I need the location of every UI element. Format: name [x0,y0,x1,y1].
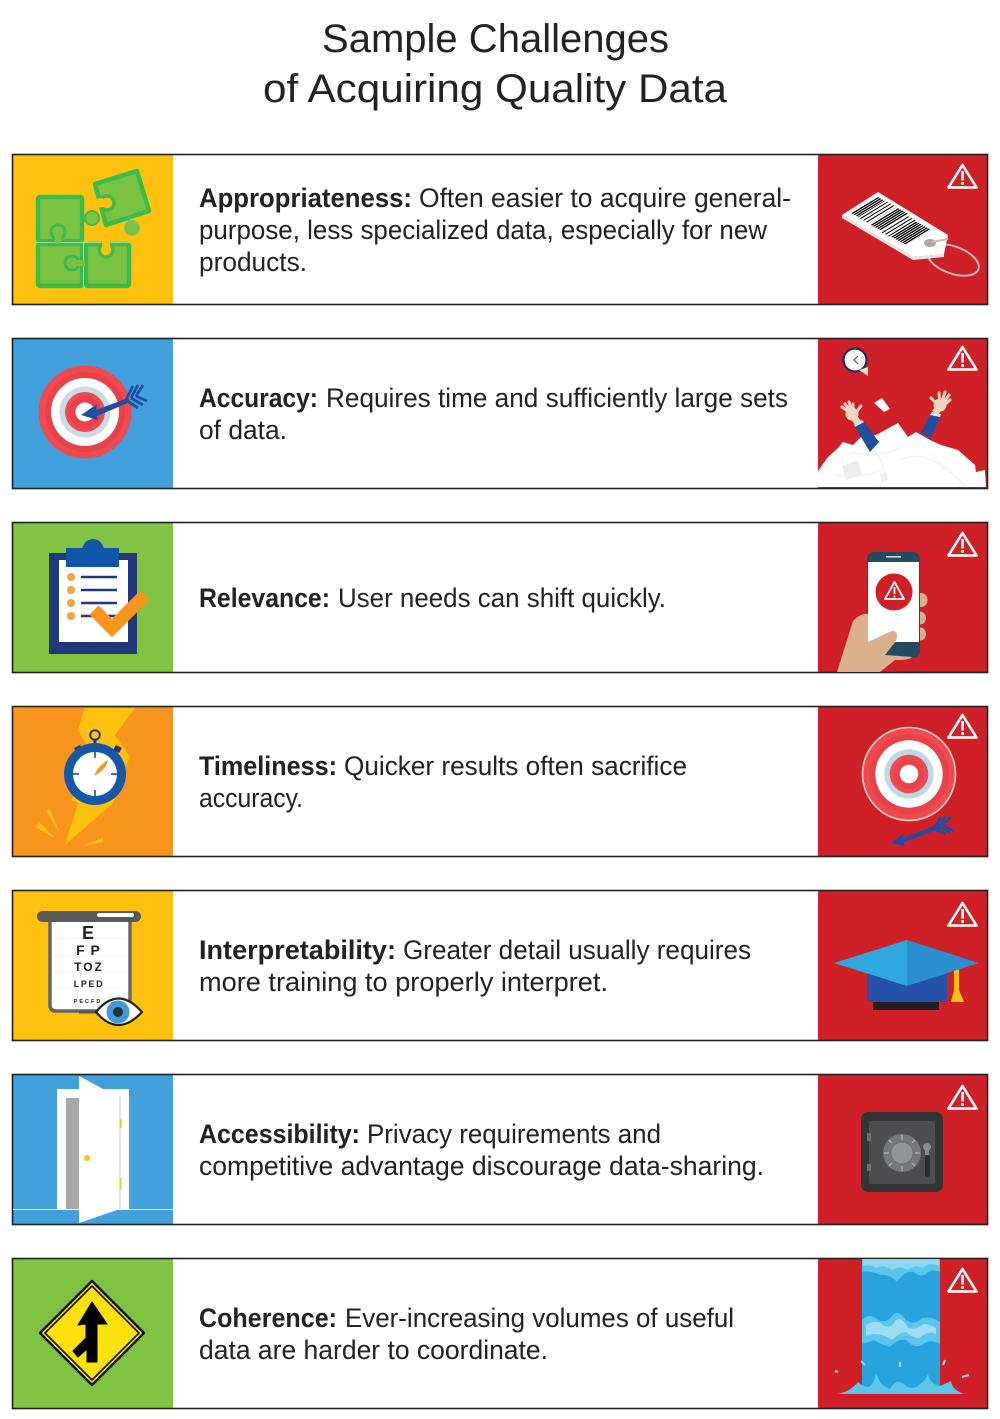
panel: interpretability [12,890,988,1041]
panel: relevance [12,522,988,673]
icon: eye chart: F P [76,942,101,958]
icon: open door [13,1076,173,1223]
icon: alert triangle [948,1269,976,1292]
icon: eye chart: PECFD [74,999,102,1005]
text: timeliness: Quicker results often sacrifice [344,751,687,781]
icon: target with missed arrow [862,728,956,846]
right sleeve and hand [921,392,950,438]
panel: accuracy [12,338,988,489]
text: accessibility [199,1119,764,1181]
right red panel [818,891,988,1041]
left sleeve and hand [842,402,879,452]
text: coherence: data are harder to coordinate. [199,1335,548,1365]
text: accessibility: Accessibility: [199,1119,360,1149]
right red panel [818,155,988,305]
left colour panel [13,155,173,305]
icon: puzzle pieces [36,171,149,288]
left colour panel [13,707,173,857]
right red panel [818,1259,988,1409]
icon: alert triangle [948,903,976,926]
icon: alert triangle [948,715,976,738]
icon: eye chart: LPED [74,979,104,989]
text: appropriateness: Appropriateness: [199,183,412,213]
icon: eye chart: TOZ [74,960,104,974]
text: timeliness [199,751,687,813]
panel: accessibility [12,1074,988,1225]
text: appropriateness: purpose, less specialized data, especially for new [199,215,768,245]
panel: coherence [12,1258,988,1409]
left colour panel [13,1259,173,1409]
text: accuracy: Requires time and sufficiently large sets [326,383,788,413]
icon: stopwatch with lightning [35,708,135,846]
text: accuracy [199,383,788,445]
text: coherence: Coherence: [199,1303,337,1333]
panel: appropriateness [12,154,988,305]
icon: alert triangle [948,1086,976,1108]
text: coherence: Ever-increasing volumes of useful [345,1303,734,1333]
icon: eye chart: E [82,923,94,943]
text: relevance [199,583,666,613]
icon: merge road sign [40,1281,144,1385]
icon: eye chart [37,911,142,1025]
text: timeliness: Timeliness: [199,751,337,781]
left colour panel [13,339,173,489]
text: accessibility: competitive advantage discourage data-sharing. [199,1151,764,1181]
text: accessibility: Privacy requirements and [367,1119,661,1149]
icon: alert triangle [948,165,976,188]
left colour panel [13,891,173,1041]
icon: phone alert in hand [837,552,928,672]
icon: safe [861,1112,943,1192]
icon: alert triangle [948,347,976,370]
title: of Acquiring Quality Data [263,67,728,111]
text: relevance: Relevance: [199,583,330,613]
icon: target with arrow [38,366,147,458]
title [263,17,728,111]
text: timeliness: accuracy. [199,783,303,813]
icon: barcode tag [842,192,983,282]
icon: graduation cap [834,940,979,1010]
text: interpretability: Interpretability: [199,935,396,965]
text: interpretability: Greater detail usually requires [403,935,751,965]
text: accuracy: of data. [199,415,287,445]
right red panel [818,523,988,673]
text: interpretability: more training to properly interpret. [199,967,608,997]
text: interpretability [199,935,751,997]
left colour panel [13,1075,173,1225]
right red panel [818,707,988,857]
right red panel [818,339,988,489]
icon: buried in paperwork [818,348,986,487]
left colour panel [13,523,173,673]
text: appropriateness: Often easier to acquire general- [419,183,791,213]
text: coherence [199,1303,734,1365]
text: appropriateness [199,183,791,277]
title: Sample Challenges [322,17,669,61]
right red panel [818,1075,988,1225]
text: accuracy: Accuracy: [199,383,318,413]
icon: waterfall [835,1259,969,1394]
text: relevance: User needs can shift quickly. [338,583,666,613]
icon: clipboard checklist [49,539,145,654]
panel: timeliness [12,706,988,857]
text: appropriateness: products. [199,247,307,277]
icon: alert triangle [948,533,976,556]
